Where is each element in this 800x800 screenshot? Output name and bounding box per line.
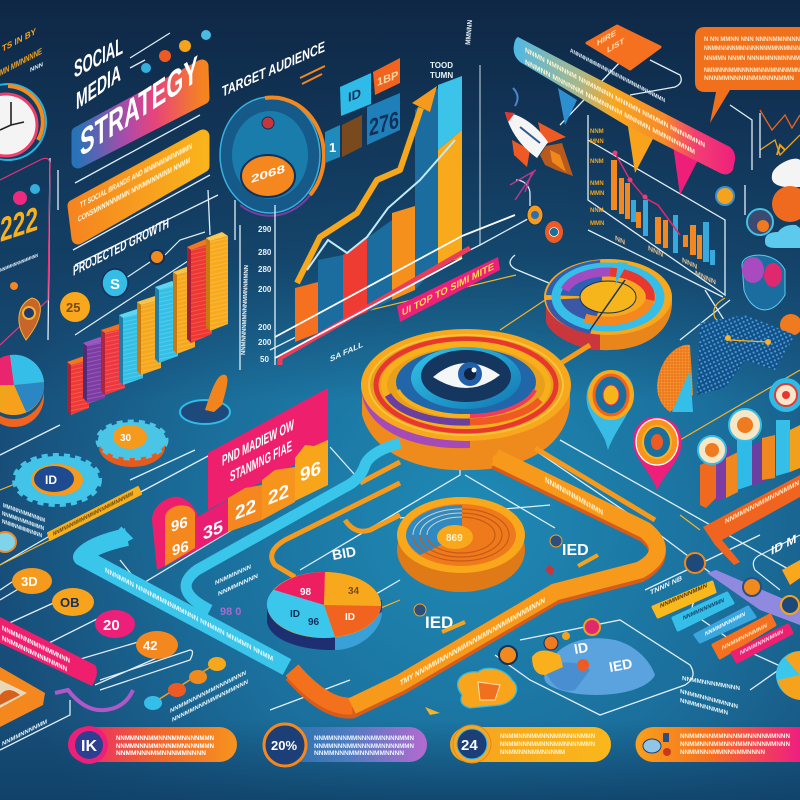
orange description pill: TT SOCIAL BRANDS AND MNMNMNMNNMMN (80, 141, 192, 210)
amber label bar (48, 487, 141, 540)
bottom pill: orange-magenta (636, 727, 800, 762)
column chart: right panel (590, 129, 716, 287)
trend line (307, 140, 455, 270)
label: ID pair: IED (562, 542, 589, 559)
axis labels: 200 (258, 285, 272, 294)
pie chart: bottom: ID (290, 609, 300, 620)
bottom pill: orange-magenta: NNMMNNNMMNNNMMNNNNMMNNN (680, 734, 790, 740)
top-left note: MN MMNNNNE (0, 46, 42, 79)
text block: left lower: NNMMNNNNMM (2, 718, 47, 748)
connector lines amber (0, 275, 800, 625)
bottom pill: magenta-orange: NNMMNNNMMNNNMMNNNNMMN (116, 744, 214, 750)
gauge: target audience circle: 2068 (251, 163, 285, 186)
stat boxes (325, 58, 400, 163)
right side icon stack (742, 186, 800, 336)
ribbon: pink label: UI TOP TO SIMI MITE (402, 261, 494, 319)
orange diamond label (587, 26, 660, 69)
orange flow path: TMY NNNMMNNNNMMNNMMNNNMMNNNMNNN (400, 595, 545, 688)
orange frame path (272, 483, 400, 577)
coin icons (60, 250, 164, 322)
joystick icon (180, 375, 230, 424)
axis labels: 280 (258, 265, 272, 274)
magenta step card: 22 (235, 495, 256, 525)
magenta label bar: NNMMNNMNNMNMNN (2, 633, 67, 674)
orange flow path (292, 457, 657, 710)
axis labels: 200 (258, 338, 272, 347)
column chart: right panel: MMN (590, 191, 604, 197)
text block: mid: NNMMNNNN (218, 572, 258, 598)
magenta step card: 96 (171, 514, 188, 536)
stat boxes: 1BP (377, 69, 399, 89)
icon: lightning chart (760, 110, 800, 187)
year panel: 222 (0, 199, 38, 250)
eye ring chart (361, 329, 571, 470)
chart guide lines (275, 215, 515, 358)
small cyan capsule (0, 532, 16, 552)
text block: lower: NNMMNNNNMMNNNMNNN (170, 669, 246, 715)
axis labels: TOOD (430, 61, 453, 70)
column chart: right panel: NNM (590, 208, 604, 214)
badge pills: 20 (103, 617, 120, 634)
text block: map note: NNMMNNNMMN (680, 697, 728, 717)
speech bubble (695, 27, 800, 123)
magenta step card: 35 (203, 516, 223, 544)
badge pills: 3D (21, 574, 38, 589)
text block: map note: NNMMNNNMMNNN (682, 676, 740, 692)
text block: mid (215, 563, 258, 598)
magenta step card: PND MADIEW OW (222, 417, 295, 470)
orange flow path: NNMNNNMMNNMN (545, 475, 603, 517)
orange banner right (703, 475, 800, 565)
column chart: right panel: NNN (682, 255, 697, 271)
gear: orange (98, 422, 166, 467)
map pin: magenta (633, 417, 682, 490)
world map globe (657, 315, 795, 412)
cyan flow path: NNNMMN NNNNMMNNMMNNN NNMMN MNMMN NNMM (105, 565, 273, 663)
badge pills (12, 568, 178, 659)
column chart: right panel: NNM (590, 129, 604, 135)
map pin: amber (586, 370, 634, 450)
orange description pill (74, 136, 203, 238)
axis labels: SA FALL (330, 339, 363, 364)
bottom pill: magenta-orange: IK (81, 738, 97, 755)
right panel with label (753, 531, 800, 590)
heading: social media: MEDIA (76, 58, 121, 115)
label bars: NNMMNNNMMN (683, 597, 724, 622)
magenta step card: 22 (268, 480, 289, 510)
badge pills: 42 (143, 638, 157, 653)
eye ring stand connectors (360, 448, 655, 520)
orange description pill: CONSMNNNNNMMN NNNMMNNMNM NNMM (78, 155, 190, 224)
orange diamond label: LIST (607, 35, 625, 55)
magenta step card: STANMNG FIAE (230, 438, 292, 486)
banner: long gradient with callout tails: ANNNNNMMNNNNMNNNMNMNNNNMMN (570, 47, 665, 105)
column chart: right panel: NMN (590, 181, 604, 187)
gear: orange: 30 (120, 433, 132, 444)
trend arrow (297, 86, 437, 283)
bottom pill: orange-magenta: NNMMNNNMMNNNMMNNNN (680, 750, 765, 756)
speech bubble: NNNMMNNNNNMMNNNMMN (704, 75, 794, 82)
column chart: right panel: NN (615, 233, 625, 247)
orange diamond label: HIRE (597, 27, 616, 48)
text block: left: NNMMNNMNNMMN (2, 510, 44, 532)
framed picture (0, 667, 45, 727)
label bars: NNMMNNNMMN (660, 582, 707, 610)
pie chart: bottom: 96 (308, 617, 320, 628)
orange cloud icon (425, 646, 517, 715)
column chart: right panel: MNN (590, 139, 604, 145)
heading: social media: SOCIAL (74, 32, 123, 84)
label bars (653, 582, 792, 662)
small dots: 98 0 (220, 606, 241, 618)
purple arrow (55, 690, 133, 710)
ring disc chart: 869 (446, 533, 463, 544)
pie chart: bottom: 98 (300, 587, 312, 598)
connector: pie to eye (558, 345, 590, 365)
stat boxes: ID (348, 86, 361, 105)
right panel with label: ID M (771, 531, 796, 558)
axis labels: TUMN (430, 71, 453, 80)
text block: map note: NNMMNNNMMNNN (680, 688, 738, 711)
bottom pill: amber (450, 725, 611, 763)
text block: lower: NNNMMNNNMMNNMMNNN (172, 678, 248, 724)
text block: left: MMNNNNMMNNNM (3, 502, 45, 524)
bottom pill: amber: NNMMNNNMMNNNMMNNNNMMN (500, 742, 595, 748)
bottom pill: amber: 24 (461, 737, 478, 754)
heading: projected growth: PROJECTED GROWTH (73, 216, 169, 280)
pie chart: bottom: ID (345, 612, 355, 623)
small pie bottom-right (776, 651, 800, 700)
column chart: right panel: NNN (648, 243, 663, 259)
magenta label bar: NNMMNNNMNNMMNNN (2, 623, 70, 665)
bottom pill: magenta-orange: NNMMNNNMMNNNMMNNNN (116, 751, 206, 757)
heading: social media (74, 32, 123, 115)
axis labels: 280 (258, 248, 272, 257)
icon: clock (0, 84, 46, 160)
bottom pill: magenta-orange (68, 726, 237, 764)
label: ID lower: IED (425, 613, 453, 632)
bottom pill: blue-purple: NNMMNNNMMNNNMMNNNNMMN (314, 744, 414, 750)
label: ID pair (545, 535, 598, 576)
bottom pill: blue-purple (264, 724, 427, 766)
cyan flow path (82, 528, 287, 667)
axis labels: 200 (258, 323, 272, 332)
column chart: right panel: NNM (590, 159, 604, 165)
magenta step card: 96 (172, 538, 189, 560)
banner: long gradient with callout tails: NNMNN MNNNNM NMMNNNM MNNMN MMNNNMNM (525, 57, 695, 156)
coin icons: 25 (66, 300, 80, 315)
map panel: ID (573, 639, 589, 657)
amber label bar: NNMNNNMMNNMMNNNNMMNNNMM (53, 491, 133, 538)
magenta step card (152, 388, 328, 570)
year panel: NNMMNNNNNMMNNN (0, 253, 38, 274)
map panel: IED (608, 655, 634, 675)
stat boxes: 1 (329, 140, 336, 155)
small target icons (527, 187, 734, 243)
top-left note: TS IN BY (2, 26, 36, 55)
label bars: NNMMNNNMMN (740, 628, 783, 657)
magenta step card: 96 (300, 457, 321, 487)
text block: mid: NNMMNNNN (215, 563, 251, 587)
pie chart: bottom: 34 (348, 586, 360, 597)
node chain (144, 657, 226, 710)
heading: target audience: TARGET AUDIENCE (222, 39, 325, 101)
area chart panel: central growth (275, 65, 480, 365)
bottom pill: amber: NNMMNNNMMNNNMMNNNNMMN (500, 734, 595, 740)
badge pills: OB (60, 595, 80, 610)
decorative icons beside heading (141, 30, 211, 73)
bottom pill: amber: NNMMNNNMMNNNMM (500, 750, 565, 756)
map panel (532, 619, 655, 695)
label: ID lower (414, 604, 465, 632)
cyan inner path (186, 443, 400, 610)
stat boxes: 276 (369, 107, 399, 142)
column chart: right panel: MMN (590, 221, 604, 227)
label: ID mid: BID (331, 543, 357, 563)
text block: left: NNMNNMMNNNN (2, 518, 42, 540)
gauge: target audience circle (220, 97, 324, 216)
bottom pill: orange-magenta: NNMMNNNMMNNNMMNNNNMMNNN (680, 742, 790, 748)
axis labels: MMNNN (465, 20, 474, 45)
magenta label bar (0, 617, 97, 686)
pie chart: left (0, 355, 44, 427)
year panel (0, 158, 50, 345)
concentric pie chart (544, 259, 672, 350)
bottom pill: blue-purple: NNMMNNNMMNNNMMNNNNMMN (314, 736, 414, 742)
ring disc chart (397, 497, 525, 592)
axis labels (241, 20, 474, 364)
pin bar chart (698, 378, 800, 508)
label bars: NNMMNNNMMN (722, 622, 767, 652)
banner: long gradient with callout tails (514, 37, 735, 195)
gear: cyan: ID (45, 473, 57, 487)
icon: rocket (505, 88, 573, 200)
label: above bars: TNNN NB (650, 573, 682, 597)
axis labels: 50 (260, 355, 269, 364)
bottom pill: magenta-orange: NNMMNNNMMNNNMMNNNNMMN (116, 736, 214, 742)
label bars: NNMMNNNMMN (705, 611, 745, 638)
axis labels: 290 (258, 225, 272, 234)
column chart: right panel: MNNN (695, 268, 716, 287)
accent stripes under target audience (300, 66, 325, 84)
top-left note: NNN (30, 61, 43, 74)
lavender band (685, 553, 800, 625)
top-left note (0, 26, 43, 79)
banner: long gradient with callout tails: NNMN NMNNNM NNMMNNN MNNMN NMMMN NNNMMNN (525, 45, 705, 150)
coin icons: S (110, 276, 120, 293)
pie chart: bottom (267, 572, 382, 650)
bar chart: projected growth (67, 232, 228, 415)
bottom pill: blue-purple: 20% (271, 738, 297, 753)
gear: cyan (15, 456, 99, 504)
axis labels: NNMNNNNMMNNNMMNNMMNN (241, 265, 250, 355)
growth trend line (75, 232, 220, 335)
icon: location pin (19, 298, 40, 340)
text block: left (2, 502, 45, 540)
bottom pill: blue-purple: NNMMNNNMMNNNMMNNNN (314, 751, 404, 757)
strategy pill (78, 47, 203, 165)
text block: map note (680, 676, 740, 717)
